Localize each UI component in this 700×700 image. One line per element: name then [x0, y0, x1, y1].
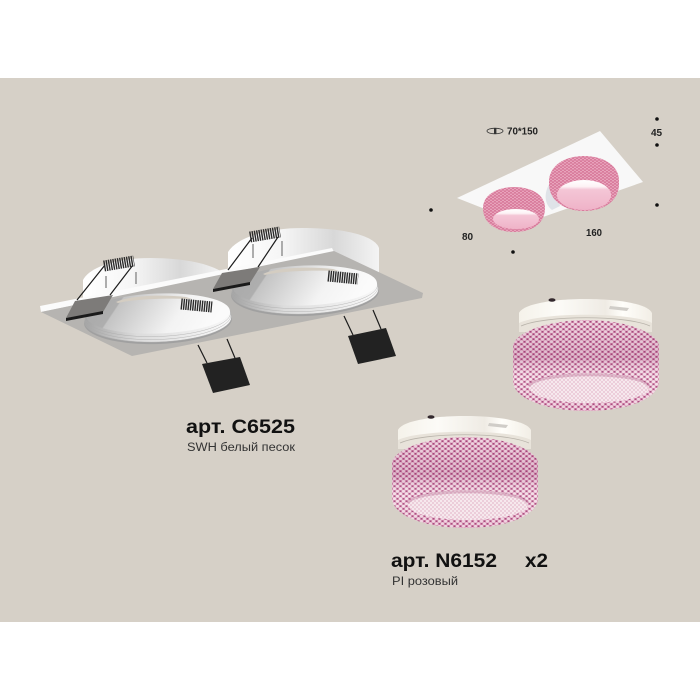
icon: cutout [487, 128, 503, 134]
product: double recessed frame [40, 228, 423, 393]
label: frame article: SWH белый песок [187, 442, 296, 454]
label: luminaire article: PI розовый [392, 576, 458, 588]
small pink ring [483, 187, 545, 232]
dimension labels: 45 [651, 128, 663, 139]
dimension dots [429, 117, 659, 254]
dimension labels: 80 [462, 232, 474, 243]
plate [40, 248, 423, 356]
white frame [457, 131, 643, 224]
reflector edge [546, 180, 560, 210]
black boxes with wires [198, 310, 396, 393]
label: frame article [186, 416, 296, 454]
rear cylinders [83, 228, 379, 310]
dimension labels: 160 [586, 228, 602, 239]
dimension labels [462, 126, 663, 243]
label: frame article: арт. C6525 [186, 416, 295, 438]
background panel [0, 78, 700, 622]
dimension labels: 70*150 [507, 126, 538, 138]
clips and wires [66, 237, 282, 321]
dimension diagram [429, 117, 663, 254]
crystal luminaire rear [513, 298, 659, 411]
springs [104, 232, 358, 307]
hole left [83, 291, 233, 347]
label: luminaire article [391, 550, 548, 588]
large pink ring [549, 156, 619, 211]
crystal luminaire front [392, 415, 538, 528]
label: luminaire article: арт. N6152 [391, 550, 497, 572]
hole right [230, 263, 380, 319]
label: luminaire article: x2 [525, 550, 548, 572]
